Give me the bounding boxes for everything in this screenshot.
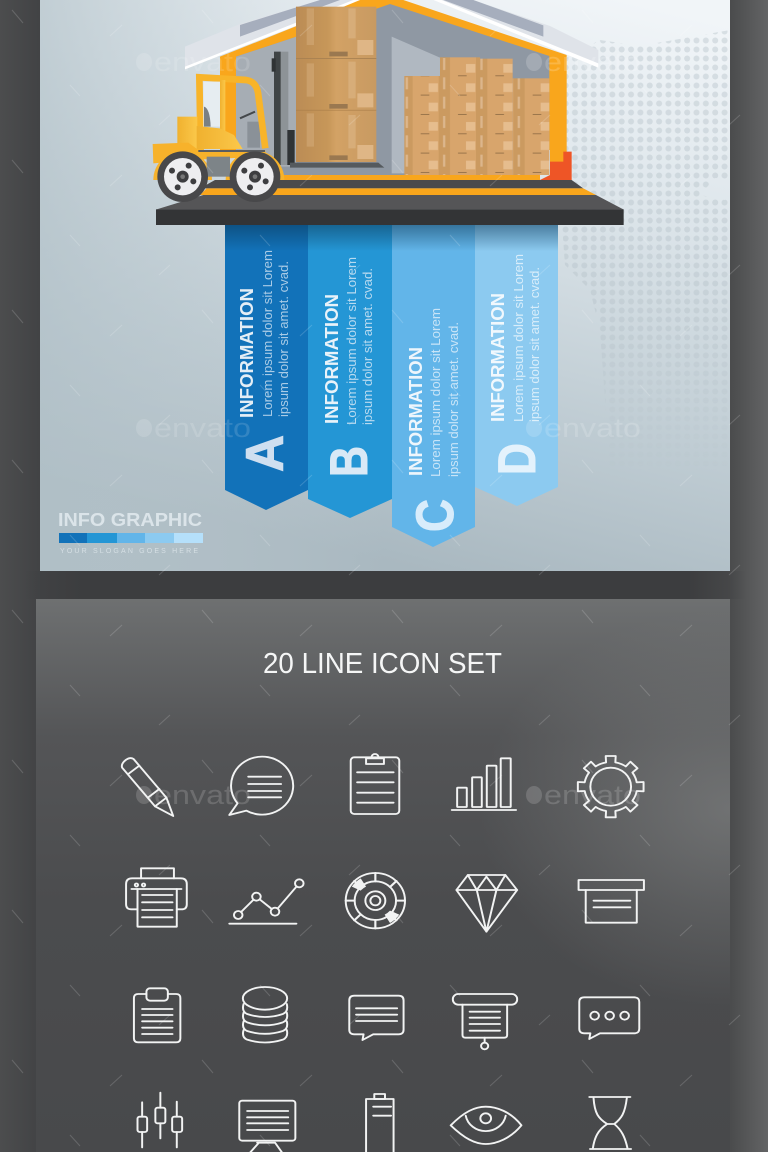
heading B: INFORMATION [321,294,342,424]
ribbon B [308,225,392,518]
roof [185,0,598,69]
letter C: C [406,499,465,532]
warehouse walls [220,0,567,177]
warehouse illustration with forklift [153,0,624,225]
watermark: envato lower left: envato [154,780,251,810]
icon: box [579,880,644,923]
large stacked cartons [296,7,376,162]
letter D: D [488,443,547,475]
letter B: B [320,446,379,477]
icon: line graph [229,879,304,924]
world map dots [562,30,728,358]
body text B [345,257,375,425]
icon: projector screen [453,994,517,1049]
forklift [153,52,384,202]
body text B: ipsum dolor sit amet. cvad. [361,268,375,425]
icon: eye [451,1107,521,1144]
body text C: Lorem ipsum dolor sit Lorem [429,308,443,477]
cab window [203,82,220,127]
rear wheel [230,151,280,202]
ribbon A [225,225,308,510]
body text D [512,254,542,422]
watermark: envato mid right: envato [544,413,641,443]
slogan: YOUR SLOGAN GOES HERE [60,548,198,555]
colour bar [59,533,203,543]
icon: battery [366,1094,394,1152]
icon: bar chart [452,758,516,810]
mast [272,52,384,168]
watermark: envato lower right: envato [544,780,641,810]
chassis [153,143,284,180]
body text B: Lorem ipsum dolor sit Lorem [345,257,359,425]
icon: casino chip [346,873,405,928]
body text A: ipsum dolor sit amet. cvad. [277,261,291,417]
ribbon D [475,225,558,506]
ribbon C [392,225,475,547]
heading D: INFORMATION [487,293,508,422]
icons rows 3 and 4 [134,987,639,1152]
panel: warehouse infographic [40,0,730,571]
shadow band between panels [24,571,746,599]
watermark: envato top right: envato [544,47,641,77]
icon: gear [578,756,644,817]
body text D: Lorem ipsum dolor sit Lorem [512,254,526,422]
heading A: INFORMATION [236,288,257,418]
icon: chat dots [579,997,639,1039]
body text D: ipsum dolor sit amet. cvad. [528,267,542,422]
warehouse interior [236,4,549,175]
icon: database [243,987,287,1042]
icon: message box [349,996,404,1040]
icon: presentation board [239,1101,295,1152]
body text C [429,308,461,477]
body text A: Lorem ipsum dolor sit Lorem [261,250,275,417]
icon: printer [126,868,187,927]
heading C: INFORMATION [405,347,426,476]
letter A: A [236,435,295,472]
floor stripe [283,175,540,180]
operator controls [240,112,260,148]
red corner block [540,152,572,180]
icon: diamond [456,875,517,932]
cab frame [199,77,265,150]
front wheel [157,151,208,202]
body text C: ipsum dolor sit amet. cvad. [447,322,461,477]
icon: pencil [122,758,173,816]
small carton stacks [404,57,549,175]
icons rows 1 and 2 [122,754,644,932]
cab pillar and body [177,80,243,150]
title: 20 LINE ICON SET [263,648,502,680]
icon: speech bubble [229,757,293,815]
logo title: INFO GRAPHIC [58,510,202,530]
panel: line icon set [36,599,730,1152]
icon: clipboard [351,754,399,814]
platform [156,180,624,225]
watermark: envato mid left: envato [154,413,251,443]
icon: hourglass [589,1097,631,1149]
icon: sliders [137,1093,182,1147]
watermark: envato top left: envato [154,47,251,77]
icon: notepad [134,988,180,1042]
logo: info graphic [58,510,203,555]
body text A [261,250,291,417]
